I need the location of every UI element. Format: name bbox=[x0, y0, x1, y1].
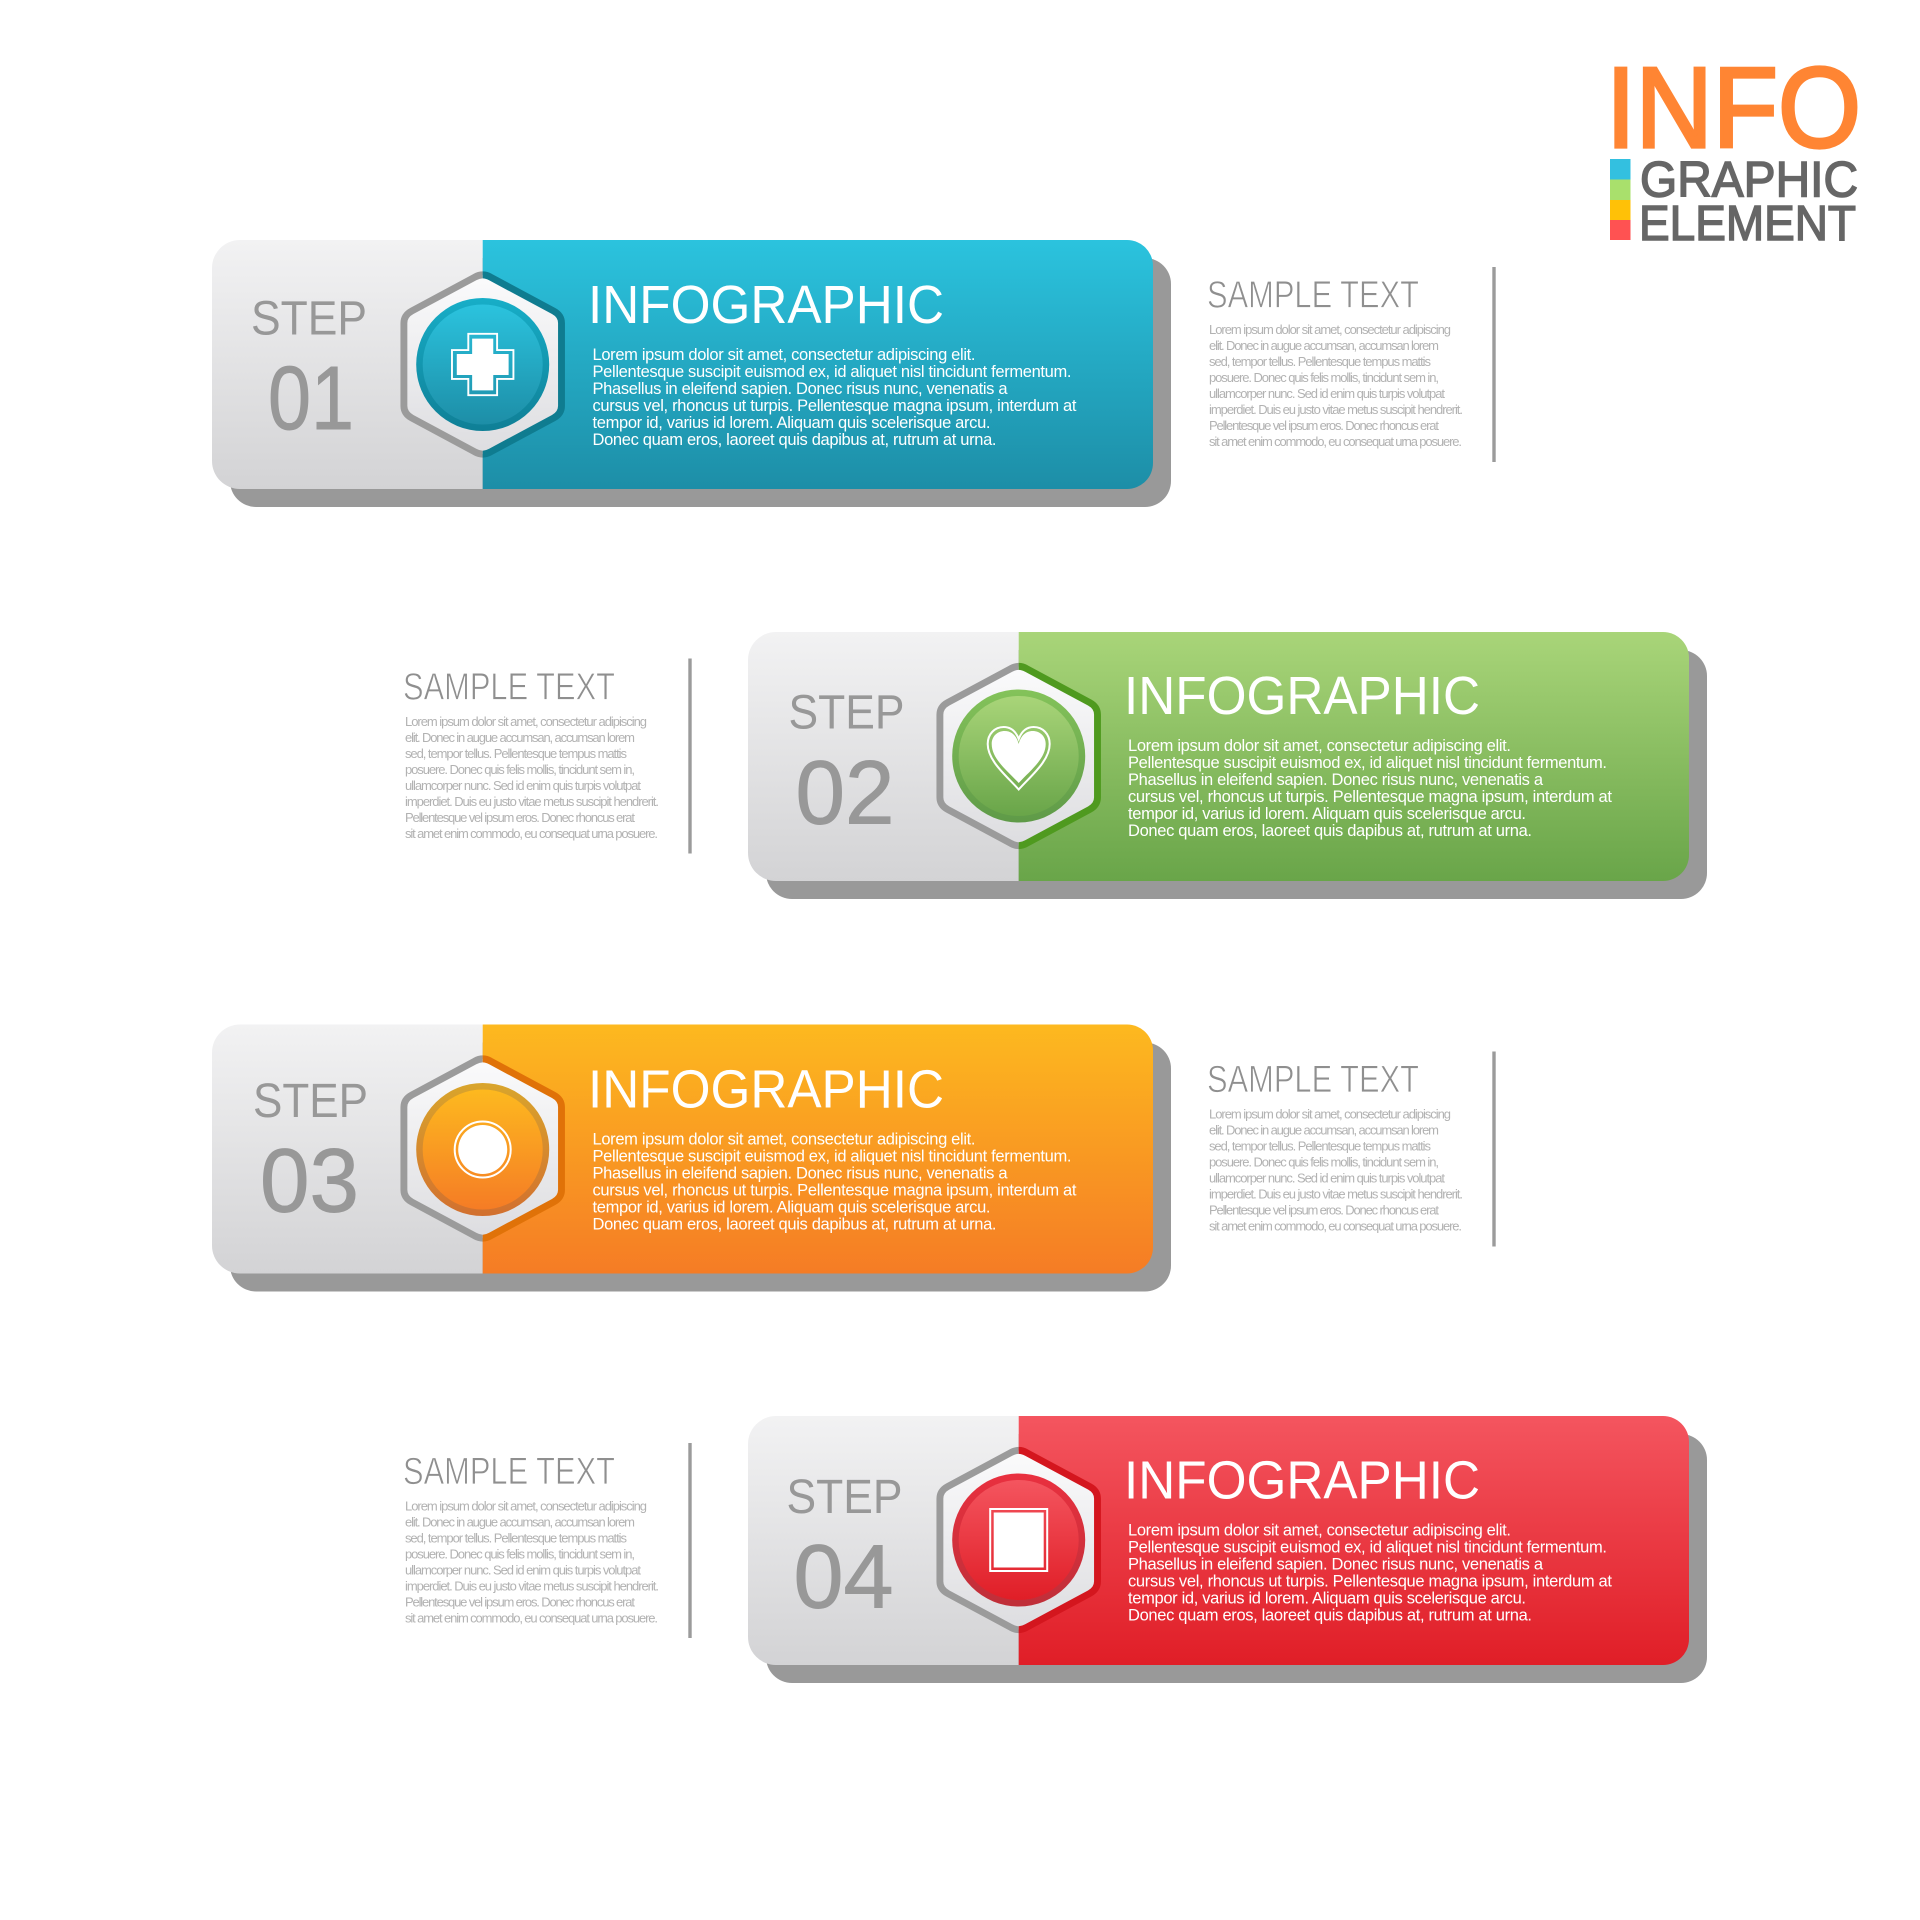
logo word: ELEMENT: ELEMENT bbox=[1639, 197, 1856, 251]
body text: Lorem ipsum dolor sit amet, consectetur adipiscing elit. bbox=[1128, 1522, 1511, 1540]
card colour right part bbox=[483, 1024, 1153, 1274]
card shadow bbox=[766, 1434, 1707, 1683]
body text: Donec quam eros, laoreet quis dapibus at, rutrum at urna. bbox=[1128, 822, 1532, 840]
side note text: Pellentesque vel ipsum eros. Donec rhoncus erat bbox=[405, 1594, 635, 1610]
logo: info graphic element bbox=[1606, 45, 1861, 251]
body text: Phasellus in eleifend sapien. Donec risus nunc, venenatis a bbox=[1128, 771, 1544, 789]
logo word: GRAPHIC: GRAPHIC bbox=[1640, 152, 1858, 208]
side note text: sed, tempor tellus. Pellentesque tempus mattis bbox=[1209, 354, 1432, 369]
side note text: ullamcorper nunc. Sed id enim quis turpis volutpat bbox=[405, 1562, 641, 1578]
step number: 04 bbox=[794, 1528, 894, 1628]
side note heading: SAMPLE TEXT bbox=[1207, 1059, 1419, 1101]
hexagon badge with heart icon bbox=[940, 666, 1098, 846]
body text: Donec quam eros, laoreet quis dapibus at, rutrum at urna. bbox=[1128, 1606, 1532, 1624]
side note text: sed, tempor tellus. Pellentesque tempus mattis bbox=[405, 746, 628, 761]
card colour right part bbox=[1019, 632, 1689, 881]
side note text: sit amet enim commodo, eu consequat urna posuere. bbox=[1209, 434, 1462, 449]
body text bbox=[592, 1130, 1077, 1234]
side note heading: SAMPLE TEXT bbox=[1207, 274, 1419, 316]
body text: cursus vel, rhoncus ut turpis. Pellentesque magna ipsum, interdum at bbox=[1128, 1572, 1612, 1590]
side note text: elit. Donec in augue accumsan, accumsan lorem bbox=[1209, 338, 1439, 353]
heading: INFOGRAPHIC bbox=[588, 275, 944, 335]
logo colour bar bbox=[1610, 159, 1630, 240]
card colour right part bbox=[483, 240, 1153, 489]
step label: STEP bbox=[788, 686, 904, 740]
side note text: sed, tempor tellus. Pellentesque tempus mattis bbox=[405, 1530, 628, 1546]
step label: STEP bbox=[251, 292, 367, 346]
step label: STEP bbox=[786, 1471, 902, 1524]
body text: tempor id, varius id lorem. Aliquam quis scelerisque arcu. bbox=[1128, 805, 1526, 823]
icon: heart bbox=[988, 727, 1050, 790]
panel: step 02 bbox=[748, 632, 1707, 899]
side note heading: SAMPLE TEXT bbox=[403, 1451, 615, 1493]
card grey left part bbox=[212, 240, 483, 489]
side note text: Lorem ipsum dolor sit amet, consectetur adipiscing bbox=[405, 1498, 647, 1514]
side note text: sit amet enim commodo, eu consequat urna posuere. bbox=[405, 826, 658, 841]
icon: square bbox=[990, 1509, 1047, 1571]
side note text: Lorem ipsum dolor sit amet, consectetur adipiscing bbox=[1209, 322, 1451, 337]
step label: STEP bbox=[253, 1075, 368, 1128]
heading: INFOGRAPHIC bbox=[588, 1060, 944, 1120]
body text: Phasellus in eleifend sapien. Donec risus nunc, venenatis a bbox=[592, 1164, 1008, 1182]
card shadow bbox=[766, 650, 1707, 899]
logo word: INFO: INFO bbox=[1606, 45, 1861, 172]
step number: 01 bbox=[268, 349, 354, 449]
side note text: ullamcorper nunc. Sed id enim quis turpis volutpat bbox=[1209, 386, 1445, 401]
side note text: imperdiet. Duis eu justo vitae metus suscipit hendrerit. bbox=[405, 794, 659, 809]
panel: step 04 bbox=[748, 1416, 1707, 1683]
side note text: sit amet enim commodo, eu consequat urna posuere. bbox=[405, 1610, 658, 1626]
body text: cursus vel, rhoncus ut turpis. Pellentesque magna ipsum, interdum at bbox=[1128, 788, 1612, 806]
side note text: imperdiet. Duis eu justo vitae metus suscipit hendrerit. bbox=[405, 1578, 659, 1594]
heading: INFOGRAPHIC bbox=[1124, 1450, 1480, 1510]
body text: Pellentesque suscipit euismod ex, id aliquet nisl tincidunt fermentum. bbox=[1128, 1538, 1607, 1556]
body text: Phasellus in eleifend sapien. Donec risus nunc, venenatis a bbox=[1128, 1556, 1544, 1574]
card shadow bbox=[230, 1042, 1171, 1292]
body text: Lorem ipsum dolor sit amet, consectetur adipiscing elit. bbox=[592, 1130, 976, 1148]
body text: Donec quam eros, laoreet quis dapibus at, rutrum at urna. bbox=[592, 1216, 996, 1234]
side note: step 01 bbox=[1207, 267, 1496, 462]
side note text: ullamcorper nunc. Sed id enim quis turpis volutpat bbox=[405, 778, 641, 793]
side note text: elit. Donec in augue accumsan, accumsan lorem bbox=[1209, 1122, 1439, 1138]
side note rule bbox=[688, 1443, 692, 1638]
body text: Lorem ipsum dolor sit amet, consectetur adipiscing elit. bbox=[592, 346, 976, 364]
side note: step 03 bbox=[1207, 1052, 1496, 1246]
heading: INFOGRAPHIC bbox=[1124, 666, 1480, 726]
body text: Lorem ipsum dolor sit amet, consectetur adipiscing elit. bbox=[1128, 737, 1511, 755]
step number: 02 bbox=[796, 744, 894, 844]
side note text: Lorem ipsum dolor sit amet, consectetur adipiscing bbox=[1209, 1106, 1451, 1122]
body text: tempor id, varius id lorem. Aliquam quis scelerisque arcu. bbox=[592, 414, 990, 432]
body text: Phasellus in eleifend sapien. Donec risus nunc, venenatis a bbox=[592, 380, 1008, 398]
panel: step 01 bbox=[212, 240, 1171, 507]
card grey left part bbox=[748, 1416, 1019, 1665]
body text bbox=[1128, 1522, 1612, 1624]
side note text: imperdiet. Duis eu justo vitae metus suscipit hendrerit. bbox=[1209, 1186, 1463, 1202]
card shadow bbox=[230, 258, 1171, 507]
card grey left part bbox=[748, 632, 1019, 881]
step number: 03 bbox=[260, 1132, 359, 1232]
body text: Pellentesque suscipit euismod ex, id aliquet nisl tincidunt fermentum. bbox=[1128, 754, 1607, 772]
side note text bbox=[405, 714, 659, 841]
side note: step 04 bbox=[403, 1443, 692, 1638]
side note text: posuere. Donec quis felis mollis, tincidunt sem in, bbox=[405, 1546, 635, 1562]
icon: cross bbox=[452, 334, 513, 395]
side note text bbox=[1209, 1106, 1463, 1234]
icon: circle bbox=[455, 1122, 511, 1178]
card grey left part bbox=[212, 1024, 483, 1274]
side note text: sed, tempor tellus. Pellentesque tempus mattis bbox=[1209, 1138, 1432, 1154]
side note text: elit. Donec in augue accumsan, accumsan lorem bbox=[405, 1514, 635, 1530]
side note rule bbox=[1492, 1052, 1496, 1246]
hexagon badge with cross icon bbox=[404, 275, 562, 454]
side note: step 02 bbox=[403, 658, 692, 854]
side note text bbox=[405, 1498, 659, 1626]
body text: Pellentesque suscipit euismod ex, id aliquet nisl tincidunt fermentum. bbox=[592, 363, 1072, 381]
panel: step 03 bbox=[212, 1024, 1171, 1292]
side note text: ullamcorper nunc. Sed id enim quis turpis volutpat bbox=[1209, 1170, 1445, 1186]
body text bbox=[592, 346, 1077, 449]
side note text: posuere. Donec quis felis mollis, tincidunt sem in, bbox=[405, 762, 635, 777]
body text: Pellentesque suscipit euismod ex, id aliquet nisl tincidunt fermentum. bbox=[592, 1148, 1072, 1166]
hexagon badge with circle icon bbox=[404, 1059, 562, 1238]
body text: cursus vel, rhoncus ut turpis. Pellentesque magna ipsum, interdum at bbox=[592, 397, 1077, 415]
side note text: Pellentesque vel ipsum eros. Donec rhoncus erat bbox=[405, 810, 635, 825]
card colour right part bbox=[1019, 1416, 1689, 1665]
side note rule bbox=[1492, 267, 1496, 462]
side note text: Pellentesque vel ipsum eros. Donec rhoncus erat bbox=[1209, 1202, 1439, 1218]
side note text: sit amet enim commodo, eu consequat urna posuere. bbox=[1209, 1218, 1462, 1234]
side note rule bbox=[688, 658, 692, 854]
body text: tempor id, varius id lorem. Aliquam quis scelerisque arcu. bbox=[1128, 1590, 1526, 1608]
side note text: Lorem ipsum dolor sit amet, consectetur adipiscing bbox=[405, 714, 647, 729]
body text bbox=[1128, 737, 1612, 840]
side note text bbox=[1209, 322, 1463, 449]
side note text: elit. Donec in augue accumsan, accumsan lorem bbox=[405, 730, 635, 745]
body text: tempor id, varius id lorem. Aliquam quis scelerisque arcu. bbox=[592, 1198, 990, 1216]
side note text: Pellentesque vel ipsum eros. Donec rhoncus erat bbox=[1209, 418, 1439, 433]
body text: cursus vel, rhoncus ut turpis. Pellentesque magna ipsum, interdum at bbox=[592, 1182, 1077, 1200]
body text: Donec quam eros, laoreet quis dapibus at, rutrum at urna. bbox=[592, 431, 996, 449]
side note text: posuere. Donec quis felis mollis, tincidunt sem in, bbox=[1209, 1154, 1439, 1170]
hexagon badge with square icon bbox=[940, 1450, 1098, 1630]
side note text: imperdiet. Duis eu justo vitae metus suscipit hendrerit. bbox=[1209, 402, 1463, 417]
side note heading: SAMPLE TEXT bbox=[403, 666, 615, 708]
side note text: posuere. Donec quis felis mollis, tincidunt sem in, bbox=[1209, 370, 1439, 385]
